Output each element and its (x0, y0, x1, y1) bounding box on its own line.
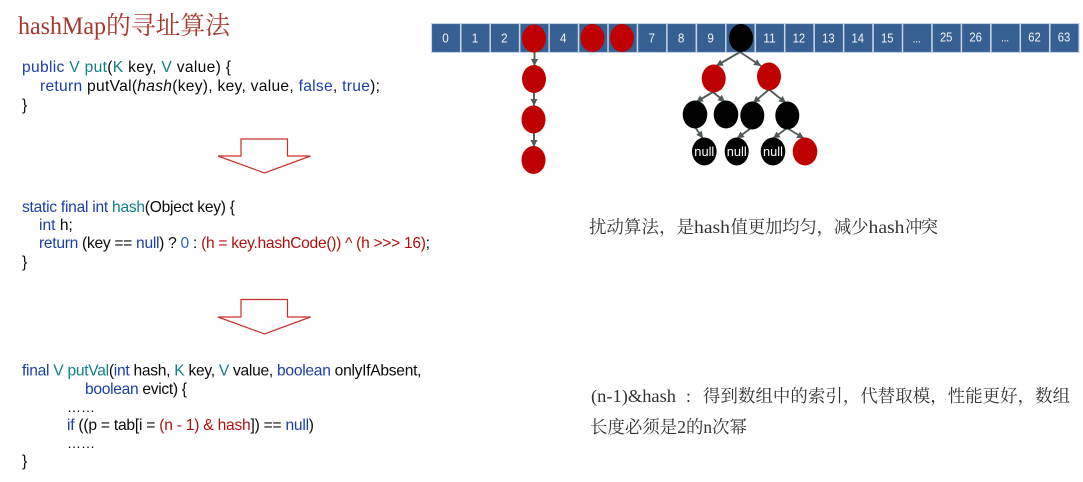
code block: hash method: return (key == null) ? 0 : (h = key.hashCode()) ^ (h >>> 16); (39, 235, 430, 252)
occupied buckets 5 and 6 (580, 24, 634, 52)
hash table array: 25 (940, 30, 952, 44)
code block: putVal method: boolean evict) { (85, 381, 187, 398)
code block: hash method: int h; (39, 217, 73, 234)
hash table array: 1 (472, 30, 478, 46)
note: perturbation algorithm: 值更加均匀，减少 (730, 217, 869, 237)
note: index calculation (590, 386, 1070, 437)
note: perturbation algorithm: hash (868, 217, 905, 237)
code block: putVal method: …… (67, 435, 95, 451)
hash table array (432, 24, 1079, 52)
code block: hash method: } (22, 254, 27, 271)
arrow: down from hash to putVal (218, 300, 310, 334)
code block: putVal method: …… (67, 399, 95, 415)
note: index calculation: (n-1)&hash (591, 386, 676, 406)
note: perturbation algorithm (589, 217, 938, 237)
hash table array: ... (1001, 30, 1009, 44)
code block: put method: return putVal(hash(key), key, value, false, true); (40, 78, 380, 95)
tree nodes: null (763, 144, 783, 159)
title (18, 12, 231, 40)
hash table array: 0 (442, 30, 449, 46)
code block: putVal method: if ((p = tab[i = (n - 1) & hash]) == null) (67, 417, 314, 434)
tree edges (695, 52, 804, 138)
title: 的寻址算法 (106, 12, 231, 40)
linked list at bucket 3 (522, 24, 546, 174)
hash table array: 9 (707, 30, 714, 46)
note: index calculation: 长度必须是2的n次幂 (590, 417, 747, 437)
arrow: down from put to hash (218, 139, 310, 173)
code block: putVal method (22, 362, 422, 470)
note: index calculation: 得到数组中的索引，代替取模，性能更好，数组 (703, 386, 1070, 406)
title: hashMap (18, 13, 106, 40)
hash table array: 14 (852, 30, 864, 46)
hash table array: 8 (678, 30, 684, 46)
code block: put method: public V put(K key, V value) { (22, 59, 231, 76)
hash table array: 15 (881, 30, 894, 46)
hash table array: 62 (1028, 30, 1041, 44)
note: perturbation algorithm: 扰动算法，是 (589, 217, 694, 237)
note: index calculation: : (686, 386, 691, 406)
hash table array: ... (913, 30, 921, 46)
hash table array: 12 (793, 30, 805, 46)
note: perturbation algorithm: 冲突 (905, 217, 938, 237)
hash table array: 63 (1058, 30, 1070, 44)
code block: hash method: static final int hash(Object key) { (22, 199, 235, 216)
hash table array: 13 (822, 30, 835, 46)
code block: putVal method: } (22, 453, 27, 470)
tree nodes: null (727, 144, 747, 159)
hash table array: 2 (501, 30, 508, 46)
code block: hash method (22, 199, 430, 271)
hash table array: 7 (648, 30, 655, 46)
hash table array: 26 (969, 30, 982, 44)
tree nodes: null (694, 144, 714, 159)
hash table array: 4 (560, 30, 567, 46)
code block: put method (22, 59, 380, 114)
red-black tree at bucket 10 (683, 24, 817, 166)
tree nodes (683, 24, 817, 166)
code block: putVal method: final V putVal(int hash, K key, V value, boolean onlyIfAbsent, (22, 362, 422, 380)
hash table array: 11 (763, 30, 776, 46)
note: perturbation algorithm: hash (694, 217, 730, 237)
code block: put method: } (22, 97, 27, 114)
